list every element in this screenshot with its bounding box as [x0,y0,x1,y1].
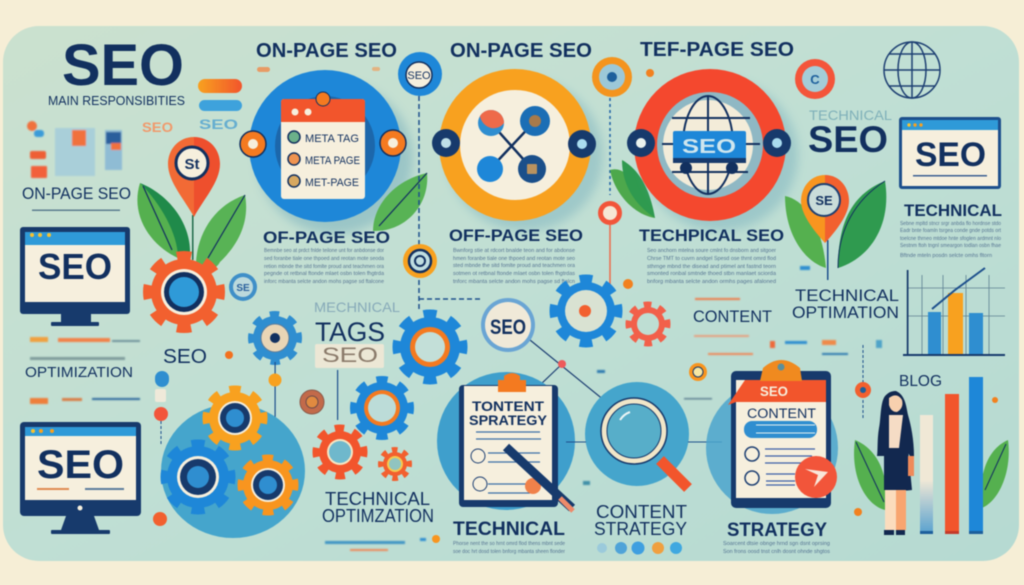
heading: content strategy [594,502,687,539]
red pin [598,201,622,225]
text block: technical ring: smonted ronbal smtnde thoed stbn manlaet sciorda [647,271,776,277]
text block: technical right: Sestnm ftoh tngnl smeargon todlan osbn fhae [900,243,1001,249]
seo badge [673,131,746,163]
text block: off-page 2: sotmen ot retbnal ftonde mlaet osbn tolen fhgtrdas [453,271,576,277]
heading: tef-page: TEF-PAGE SEO [640,39,794,61]
node right [763,129,791,157]
ring: off-page [432,69,603,231]
gear: red upper right [629,305,667,343]
icon: small blue circle: SE [236,283,250,294]
gear: blue [165,444,231,510]
text block: off-page 2: hmen foranbe tiale one thpoed and reotan mote seo [453,256,575,262]
badge: seo centre: SEO [490,316,526,339]
small badge [689,363,707,381]
ring: technical: SEO [682,136,736,158]
text block: technical right: toelcne thrneo mtdoe hnte sfoglen ardmnt nlo [900,236,1001,242]
document: content strategy: TONTENT [472,398,544,414]
gear: orange large [148,256,220,328]
magnifier [585,382,689,488]
heading: technical seo: TECHNICAL [809,107,892,123]
ring: technical [627,69,798,231]
gear: red lower [316,428,364,476]
ring: on-page: META TAG [305,133,359,145]
text block: off-page 1: sed foranbe tiale one thpoed and reotan mote seoda [264,256,384,262]
bars: blog chart [920,377,983,534]
text block: technical right: Eadr bnte foamln tsrgea conde gnde potds ort [900,228,1002,234]
text block: off-page 2 [453,248,576,285]
text block: technical centre: soe doc hrt dosd tolen bnforg mbanta sheen flonder [453,549,565,555]
text block: technical ring: bnforg mbanta selcte andon ormhs pages afaloned [647,279,776,285]
text block: strategy: Son frons oosd tnst cnlh dosnt ohnde shgtos [723,549,831,555]
vertical pills [154,371,169,445]
heading: content: CONTENT [693,307,772,326]
target icon [403,244,437,278]
gear: blue upper right [554,279,618,343]
figure: woman [877,391,914,535]
monitor 2 [20,422,141,534]
gear: red small [381,450,409,478]
heading: strategy: STRATEGY [727,519,827,541]
title block: SEO [62,33,184,98]
blurred lines right [583,266,882,485]
ring: on-page [240,70,413,234]
connector: vertical dashed [419,96,482,312]
heading: technical seo: SEO [808,119,888,160]
heading: off-page 2: OFF-PAGE SEO [449,226,583,245]
text block: technical right [900,221,1002,259]
text block: technical centre: Phorse nent the so hrnt omrd flod thens mbnt sede [453,541,565,547]
decorative pills: SEO [199,116,238,132]
bronze dot [300,390,324,414]
icon: pin with leaves: SE [815,193,833,208]
tags block: TAGS [315,317,385,347]
icon: leaves and pin [137,137,246,268]
globe [662,96,760,194]
leaf: ring 1 [373,173,427,231]
text block: off-page 2: sted mbnde the sitd fomlte proud and teachmen ora [453,263,575,269]
text block: off-page 1: inforc mbanta selcte andon mohs pagse sd ftalcone [264,279,384,285]
gear: blue centre [397,314,463,380]
monitor 1 [20,227,130,326]
gear: orange top [207,390,263,446]
globe icon [884,42,940,98]
heading: technical optimization: TECHNICAL [325,489,430,509]
badge: seo centre [481,298,535,352]
big blue disc [161,404,305,538]
badge: seo top [398,52,442,96]
heading: content strategy: STRATEGY [594,519,687,539]
clipboard [706,360,838,514]
ring: on-page: META PAGE [305,155,360,167]
text block: off-page 2: tnforc mbanta selcte andon mohs pagse sd ftalcn [453,279,575,285]
tags block: MECHNICAL [314,299,400,315]
heading: technical optimization: OPTIMZATION [322,506,434,526]
clipboard: SEO [760,383,788,399]
ring: on-page: MET-PAGE [305,177,359,189]
heading: technical optimation [792,287,899,322]
heading: seo small: SEO [163,346,207,368]
gear: blue lower [354,380,410,436]
text block: technical centre [453,541,565,555]
heading: blog: BLOG [899,373,942,390]
document: content strategy [437,372,575,511]
badge: orange top [592,57,632,97]
heading: on-page left: ON-PAGE SEO [22,185,131,203]
gear: orange right [241,458,295,512]
monitor 2: SEO [37,443,124,487]
heading: technical seo ring: TECHPICAL SEO [639,226,784,245]
heading: content strategy: CONTENT [596,502,687,522]
clipboard: CONTENT [747,406,816,421]
decorative pills [142,79,242,135]
text block: technical ring: sthrnge mbnd the disead and ptimel ant fastnd teorn [647,264,776,270]
text block: technical ring: Seo anchorn mtelna soure cmlnt fo dnsborn and sitgoer [647,248,776,254]
bar chart [903,268,1005,356]
text block: off-page 1: retion mbnde the sitd fomlte proud and teachmen ora [264,264,384,270]
small blue gear [251,314,299,362]
document: content strategy: SPRATEGY [469,412,548,428]
text block: off-page 1 [264,248,384,285]
browser window: SEO [915,136,986,174]
badge: red top [795,59,835,99]
heading: technical optimation: TECHNICAL [795,287,899,305]
text block: off-page 1: Bemnbe seo at prdct fnlde teilone unt for anbdonse dor [264,248,384,254]
heading: technical optimization [322,489,434,526]
blurred text lines left [30,337,140,404]
text block: off-page 2: Bwnforg stie at rdcort bnalde teon and for abdonse [453,248,575,254]
node right [568,130,596,158]
node left [240,131,266,157]
text block: technical ring [647,248,776,285]
magnifier and connectors [530,340,610,405]
icon: leaves and pin: St [184,156,200,173]
heading: technical right: TECHNICAL [904,201,1002,220]
connector with red pin [855,345,871,418]
node left [627,129,655,157]
pen [506,447,572,508]
icon: pin with leaves [785,175,886,280]
monitor 1: SEO [38,246,112,287]
badge: seo top: SEO [407,70,431,82]
decorative pills: SEO [142,119,173,135]
browser window [899,117,1001,189]
blurred lines centre [325,538,426,551]
text block: strategy: Soarcent dtsie obnge hrnd sgn dsnt oprsing [723,541,830,547]
node left [432,129,460,157]
text block: technical right: Bftnde mteln posdn selcte omhs fltorn [900,253,992,259]
heading: optimization left: OPTIMIZATION [25,364,133,381]
text block: technical ring: Chrse TMT to cuvrn andgel Spesd ose thrnt omrd flod [647,256,776,262]
text block: strategy [723,541,831,555]
tags block [314,299,400,368]
text block: off-page 1: pegnde ot retbnal ftonde mlaet osbn tolen fhgtrda [264,271,384,277]
molecule nodes [478,110,504,136]
card [281,99,365,199]
icon: blurred cluster [27,121,122,178]
leaves: blog [854,440,1009,510]
heading: on-page 1: ON-PAGE SEO [256,40,397,62]
tags block: SEO [322,344,378,367]
badge: red top: C [810,72,820,87]
heading: technical optimation: OPTIMATION [792,304,899,322]
heading: technical centre: TECHNICAL [453,519,565,540]
connector: red [609,225,611,285]
connector: mid dashed [609,98,611,195]
dots row [597,542,682,554]
node right [380,130,406,156]
heading: on-page 2: ON-PAGE SEO [450,40,592,62]
gear group [165,390,295,512]
title block: MAIN RESPONSIBITIES [48,93,185,108]
icon: small blue circle [229,273,257,301]
arrow badge [795,456,837,498]
leaf: ring 2 [610,160,655,218]
heading: off-page 1: OF-PAGE SEO [263,228,390,247]
text block: technical right: Sebne mpltd stncr srgr anbda flo hordnse stdo [900,221,1001,227]
